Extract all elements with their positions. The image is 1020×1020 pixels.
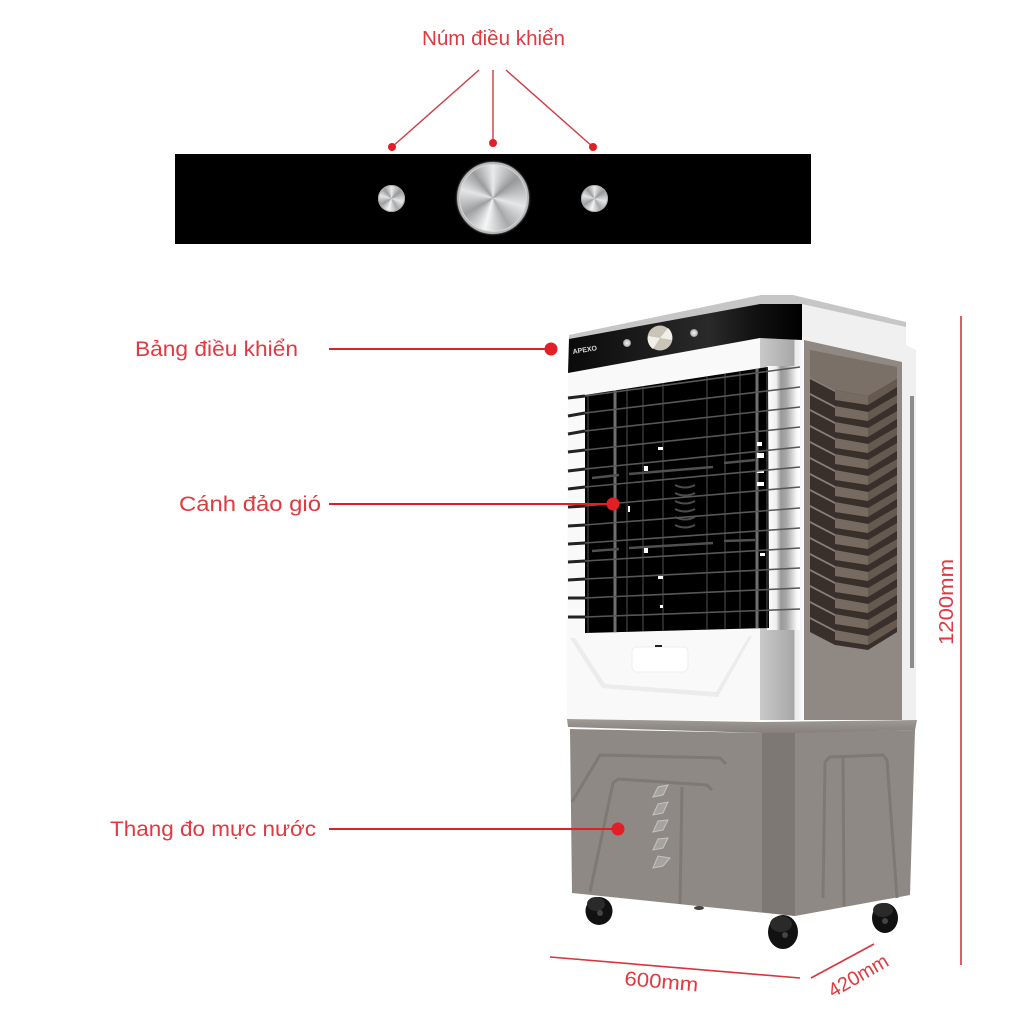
upper right white shell <box>802 304 916 720</box>
icon: left small knob <box>378 185 405 212</box>
arrows to knobs <box>388 70 597 151</box>
side louvers <box>810 377 897 650</box>
tank handle panel <box>632 645 688 672</box>
wheels <box>586 897 898 949</box>
pointer: air louvers <box>329 498 620 510</box>
front corner column <box>760 338 805 720</box>
dimension: height: 1200mm <box>936 559 958 645</box>
louvers <box>585 367 800 617</box>
cooler body <box>567 295 917 949</box>
dimension: width: 600mm <box>624 968 699 996</box>
base moulded lines <box>572 755 897 906</box>
dimension: width <box>550 957 800 996</box>
icon: main rotary knob <box>457 162 529 234</box>
water level gauge <box>653 785 670 868</box>
label: air louvers: Cánh đảo gió <box>179 493 321 516</box>
pointer: control panel <box>329 342 558 356</box>
base tank <box>567 719 917 916</box>
black control band <box>568 304 802 373</box>
louver left ends <box>568 396 585 617</box>
label: water level: Thang đo mực nước <box>110 818 316 841</box>
label: control panel: Bảng điều khiển <box>135 338 298 361</box>
top cap <box>569 295 906 340</box>
side panel <box>804 340 902 720</box>
fan guard stripes <box>675 485 695 528</box>
icon: right small knob <box>581 185 608 212</box>
band controls <box>623 326 698 350</box>
dimension: depth: 420mm <box>824 950 893 1002</box>
front white face <box>567 338 760 720</box>
right side slot <box>910 396 914 668</box>
lower front recess <box>570 636 752 697</box>
product illustration: air cooler <box>567 295 917 949</box>
grille edge strip <box>767 366 800 630</box>
pointer: water level <box>329 822 624 836</box>
control panel close-up <box>175 154 811 244</box>
band logo: APEXO <box>572 345 598 356</box>
heading: control knobs: Núm điều khiển <box>422 28 565 50</box>
black air grille <box>585 367 769 633</box>
